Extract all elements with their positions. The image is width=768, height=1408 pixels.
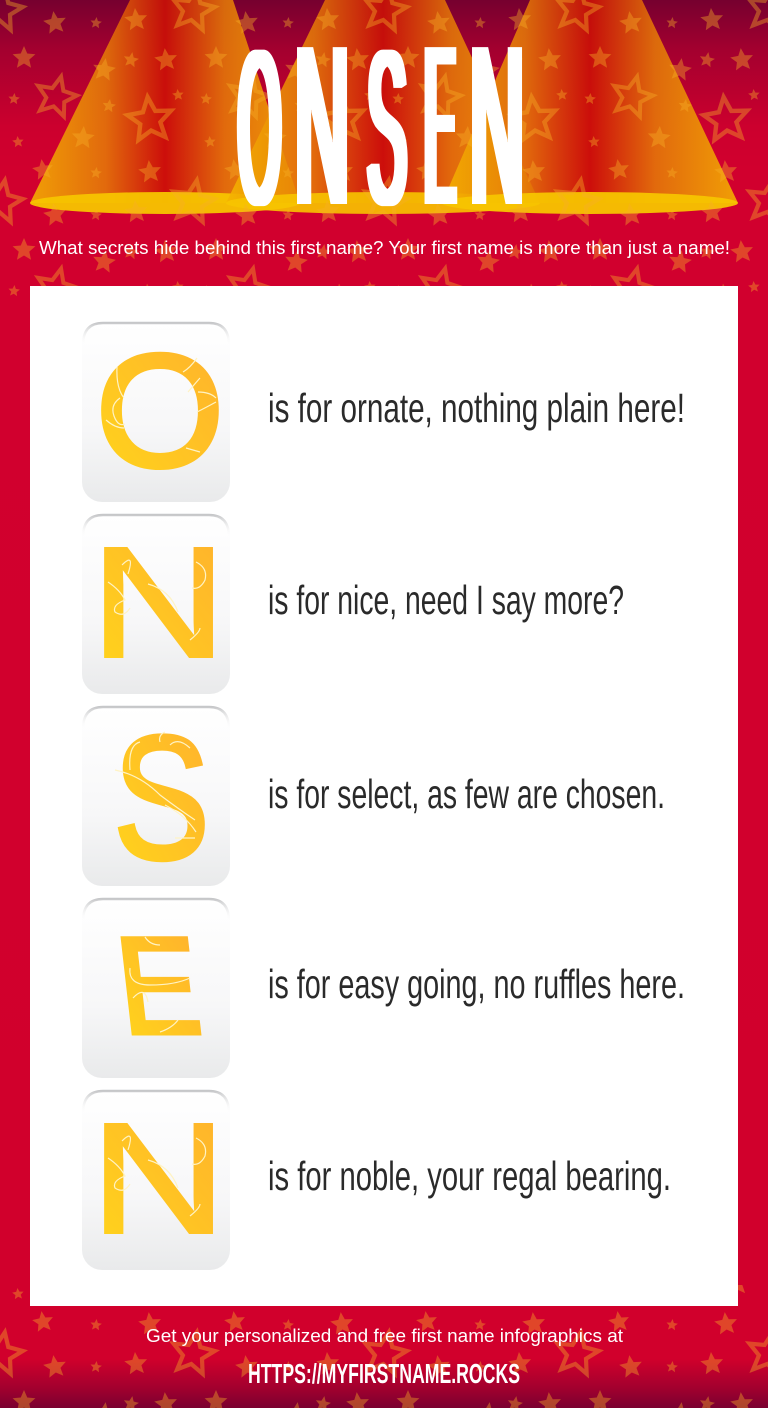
tile O: O [96, 322, 224, 500]
tile E: E [110, 910, 208, 1063]
spotlight centre [226, 0, 540, 214]
text N: is for nice, need I say more? [268, 577, 624, 623]
tile N second: N [90, 1090, 227, 1266]
subtitle: What secrets hide behind this first name? Your first name is more than just a name! [39, 238, 730, 258]
title [238, 0, 524, 253]
tile S [82, 699, 230, 895]
spotlight right [442, 0, 738, 214]
row: E [82, 899, 685, 1078]
title: N [470, 0, 524, 252]
spotlight beams [30, 0, 738, 214]
title: N [295, 0, 349, 252]
row: O [82, 322, 685, 502]
title: S [368, 6, 406, 252]
tile N: N [90, 514, 227, 690]
title: E [425, 0, 455, 253]
row: N [82, 514, 624, 694]
spotlight left [30, 0, 300, 214]
white content panel [30, 286, 738, 1306]
row: S [82, 699, 665, 895]
footer line: Get your personalized and free first name infographics at [146, 1325, 623, 1346]
title: O [238, 5, 281, 252]
row: N (second) [82, 1090, 671, 1270]
tile E [82, 899, 230, 1078]
footer url: HTTPS://MYFIRSTNAME.ROCKS [248, 1358, 520, 1389]
tile S: S [114, 699, 209, 895]
